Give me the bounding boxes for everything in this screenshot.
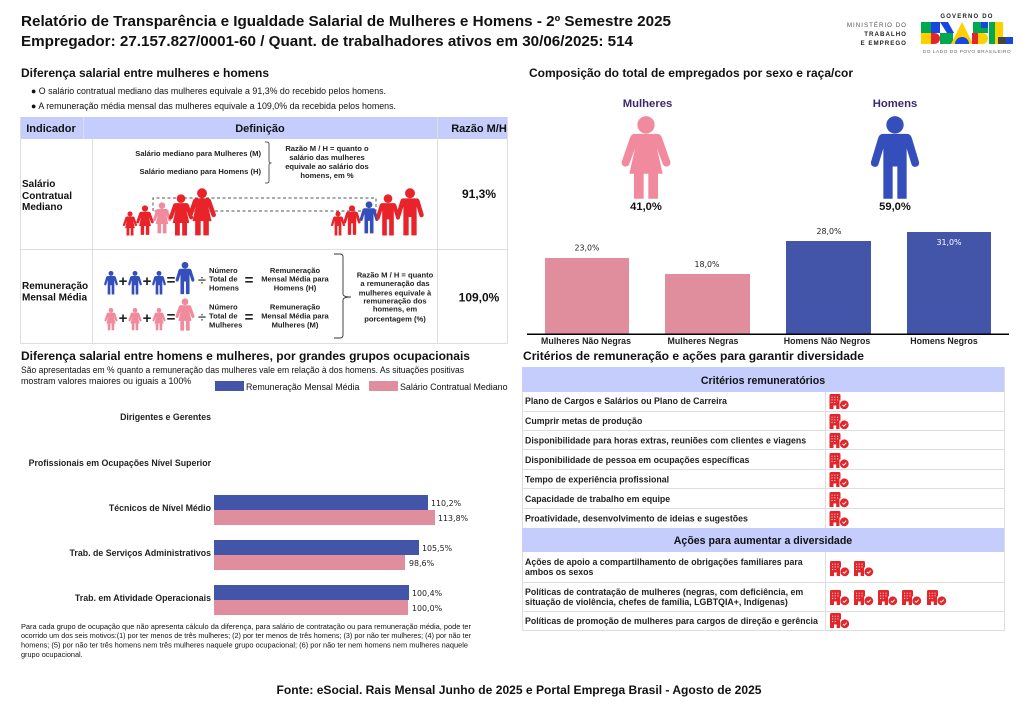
table: critérios remuneratórios: Capacidade de trabalho em equipe bbox=[525, 494, 670, 504]
row: salário contratual mediano: Contratual bbox=[22, 191, 72, 202]
table: critérios remuneratórios bbox=[522, 367, 1004, 630]
bar chart: grupos ocupacionais: 110,2% bbox=[431, 499, 462, 508]
panel: diferença salarial entre mulheres e homens bbox=[20, 66, 508, 344]
row: remuneração mensal média: Mensal Média para bbox=[261, 312, 330, 320]
row: remuneração mensal média: Homens bbox=[209, 284, 239, 292]
row: remuneração mensal média: Homens (H) bbox=[274, 284, 317, 292]
row: remuneração mensal média: Mulheres bbox=[209, 320, 242, 330]
row: remuneração mensal média: homens, em bbox=[373, 304, 417, 314]
row: salário contratual mediano: Mediano bbox=[22, 202, 63, 213]
legend: Remuneração Mensal Média bbox=[246, 382, 360, 392]
row: remuneração mensal média: = bbox=[167, 309, 176, 326]
row: remuneração mensal média: porcentagem (%) bbox=[364, 314, 426, 324]
table: ações para aumentar a diversidade: Ações de apoio a compartilhamento de obrigações familiares para bbox=[525, 557, 803, 567]
heading: Critérios de remuneração e ações para garantir diversidade bbox=[523, 349, 864, 363]
bar chart: grupos ocupacionais: 100,0% bbox=[412, 604, 443, 613]
row: salário contratual mediano: Salário bbox=[22, 179, 55, 190]
row: salário contratual mediano: Salário mediano para Mulheres (M) bbox=[135, 149, 261, 158]
table: ações para aumentar a diversidade: Ações para aumentar a diversidade bbox=[674, 535, 852, 547]
text block: footnote: Para cada grupo de ocupação que não apresenta cálculo da diferença, para salário de contratação ou para remuneração média, pode ter bbox=[21, 622, 472, 631]
table header: Definição bbox=[235, 123, 285, 135]
icon: homens: 59,0% bbox=[879, 201, 911, 213]
icon: homens bbox=[871, 98, 919, 213]
icon: mulheres: Mulheres bbox=[623, 98, 672, 110]
heading: Diferença salarial entre homens e mulheres, por grandes grupos ocupacionais bbox=[21, 349, 470, 363]
bar chart: composição: 23,0% bbox=[574, 244, 600, 252]
row: remuneração mensal média: mulheres equivale à bbox=[359, 288, 432, 298]
logo: governo do Brasil: GOVERNO DO bbox=[940, 14, 994, 20]
text block: footnote bbox=[21, 622, 472, 659]
table header: Indicador bbox=[26, 123, 76, 135]
row: remuneração mensal média: = bbox=[167, 272, 176, 289]
table: critérios remuneratórios: Disponibilidade para horas extras, reuniões com clientes e viagens bbox=[525, 436, 806, 446]
row: salário contratual mediano: Razão M / H = quanto o bbox=[285, 144, 369, 153]
bar chart: grupos ocupacionais: Técnicos de Nível Médio bbox=[109, 503, 212, 513]
icon: mulheres bbox=[622, 98, 672, 213]
row: salário contratual mediano bbox=[22, 142, 496, 236]
text block: key findings: ● A remuneração média mensal das mulheres equivale a 109,0% da recebida pelos homens. bbox=[31, 101, 396, 111]
row: remuneração mensal média: Remuneração bbox=[270, 302, 320, 312]
row: salário contratual mediano: salário das mulheres bbox=[289, 153, 365, 162]
icons: critérios bbox=[830, 394, 849, 526]
logo: ministério bbox=[847, 22, 907, 47]
icons: ações bbox=[830, 561, 946, 628]
bar chart: grupos ocupacionais: 98,6% bbox=[409, 559, 435, 568]
panel: composição por sexo e raça/cor bbox=[527, 66, 1009, 346]
legend: Salário Contratual Mediano bbox=[400, 382, 508, 392]
bar chart: composição: 31,0% bbox=[936, 238, 962, 247]
bar chart: composição: 28,0% bbox=[816, 227, 842, 236]
text block: explanation: São apresentadas em % quanto a remuneração das mulheres vale em relação à dos homens. As situações positivas bbox=[21, 365, 465, 375]
row: remuneração mensal média: Razão M / H = quanto bbox=[357, 270, 434, 280]
row: remuneração mensal média: ÷ bbox=[198, 272, 206, 289]
heading: Diferença salarial entre mulheres e homens bbox=[21, 66, 269, 80]
table: ações para aumentar a diversidade: Políticas de contratação de mulheres (negras, com deficiência, em bbox=[525, 587, 803, 597]
icon: mulheres: 41,0% bbox=[630, 201, 662, 213]
title bbox=[21, 14, 671, 50]
bar chart: composição: Homens Negros bbox=[910, 336, 978, 346]
source footer: Fonte: eSocial. Rais Mensal Junho de 2025 e Portal Emprega Brasil - Agosto de 2025 bbox=[276, 685, 762, 697]
row: remuneração mensal média: Número bbox=[209, 302, 238, 312]
row: remuneração mensal média: Remuneração bbox=[22, 281, 88, 292]
bar chart: composição: Mulheres Negras bbox=[668, 336, 739, 346]
table: critérios remuneratórios: Plano de Cargos e Salários ou Plano de Carreira bbox=[525, 396, 727, 406]
row: remuneração mensal média: = bbox=[245, 272, 254, 289]
text block: explanation bbox=[21, 365, 465, 386]
row: remuneração mensal média: Número bbox=[209, 266, 238, 275]
table: critérios remuneratórios: Cumprir metas de produção bbox=[525, 416, 643, 426]
row: remuneração mensal média: remuneração dos bbox=[363, 296, 427, 306]
bar chart: grupos ocupacionais: 113,8% bbox=[438, 514, 469, 523]
legend bbox=[215, 381, 508, 392]
text block: key findings: ● O salário contratual mediano das mulheres equivale a 91,3% do recebido pelos homens. bbox=[31, 86, 386, 96]
bar chart: composição: Homens Não Negros bbox=[784, 336, 870, 346]
bar chart: grupos ocupacionais: 100,4% bbox=[412, 589, 443, 598]
panel: diferença por grandes grupos ocupacionais bbox=[21, 349, 508, 659]
row: salário contratual mediano: Salário mediano para Homens (H) bbox=[139, 167, 261, 176]
row: remuneração mensal média: Mulheres (M) bbox=[272, 320, 319, 330]
bar chart: composição bbox=[527, 227, 1009, 346]
row: remuneração mensal média: Mensal Média para bbox=[261, 274, 330, 284]
row: remuneração mensal média: a remuneração das bbox=[360, 279, 430, 288]
row: remuneração mensal média: Mensal Média bbox=[22, 292, 87, 304]
row: remuneração mensal média: + bbox=[119, 273, 128, 290]
row: remuneração mensal média: Remuneração bbox=[270, 266, 320, 275]
title: Relatório de Transparência e Igualdade Salarial de Mulheres e Homens - 2º Semestre 2025 bbox=[21, 14, 671, 30]
row: remuneração mensal média: 109,0% bbox=[459, 290, 500, 304]
table: ações para aumentar a diversidade: Políticas de promoção de mulheres para cargos de direção e gerência bbox=[525, 616, 818, 626]
row: remuneração mensal média: = bbox=[245, 309, 254, 326]
row: remuneração mensal média: ÷ bbox=[198, 309, 206, 326]
table: ações para aumentar a diversidade: ambos os sexos bbox=[525, 567, 594, 577]
row: salário contratual mediano: homens, em % bbox=[300, 171, 354, 180]
text block: key findings bbox=[31, 86, 396, 111]
bar chart: grupos ocupacionais: Trab. em Atividade Operacionais bbox=[75, 593, 211, 603]
row: remuneração mensal média: + bbox=[119, 310, 128, 327]
panel: critérios de remuneração e ações bbox=[522, 349, 1004, 630]
bar chart: grupos ocupacionais: 105,5% bbox=[422, 544, 453, 553]
row: remuneração mensal média bbox=[22, 254, 500, 338]
logo: governo do Brasil: DO LADO DO POVO BRASILEIRO bbox=[923, 49, 1011, 55]
logo: ministério: MINISTÉRIO DO bbox=[847, 22, 907, 29]
table: critérios remuneratórios: Critérios remuneratórios bbox=[701, 375, 825, 387]
text block: explanation: mostram valores maiores ou iguais a 100% bbox=[21, 376, 191, 386]
table: ações para aumentar a diversidade: situação de violência, chefes de família, LGBTQIA+, Indígenas) bbox=[525, 597, 788, 607]
text block: footnote: grupo ocupacional. bbox=[21, 650, 83, 659]
row: salário contratual mediano: 91,3% bbox=[462, 187, 496, 201]
table: critérios remuneratórios: Tempo de experiência profissional bbox=[525, 474, 669, 484]
logo: governo do Brasil bbox=[921, 14, 1013, 55]
icon: homens: Homens bbox=[873, 98, 917, 110]
bar chart: grupos ocupacionais: Profissionais em Ocupações Nível Superior bbox=[29, 458, 212, 468]
title: Empregador: 27.157.827/0001-60 / Quant. de trabalhadores ativos em 30/06/2025: 514 bbox=[21, 34, 633, 50]
table: ações para aumentar a diversidade bbox=[522, 528, 1004, 628]
table header bbox=[26, 123, 507, 135]
row: remuneração mensal média: + bbox=[143, 310, 152, 327]
logo: ministério: E EMPREGO bbox=[861, 40, 907, 47]
table: critérios remuneratórios: Disponibilidade de pessoa em ocupações específicas bbox=[525, 455, 750, 465]
bar chart: composição: 18,0% bbox=[694, 260, 720, 269]
row: salário contratual mediano: equivale ao salário dos bbox=[285, 162, 369, 171]
bar chart: grupos ocupacionais: Trab. de Serviços Administrativos bbox=[70, 548, 211, 558]
heading: Composição do total de empregados por sexo e raça/cor bbox=[529, 66, 853, 80]
table: indicators bbox=[20, 117, 508, 344]
row: remuneração mensal média: Total de bbox=[209, 274, 238, 284]
bar chart: composição: Mulheres Não Negras bbox=[541, 336, 631, 346]
text block: footnote: homens; (5) por não ter três homens nem três mulheres naquele grupo ocupacional; (6) por não ter nem homens nem mulheres naquele bbox=[21, 640, 468, 650]
table: critérios remuneratórios: Proatividade, desenvolvimento de ideias e sugestões bbox=[525, 514, 748, 524]
bar chart: grupos ocupacionais: Dirigentes e Gerentes bbox=[120, 412, 211, 422]
row: remuneração mensal média: + bbox=[143, 273, 152, 290]
row: remuneração mensal média: Total de bbox=[209, 312, 238, 320]
logo: ministério: TRABALHO bbox=[864, 31, 907, 38]
bar chart: grupos ocupacionais bbox=[29, 412, 469, 615]
text block: footnote: ocorrido um dos seis motivos:(1) por ter menos de três mulheres; (2) por ter menos de três homens; (3) por não ter mulheres; (4) por não ter bbox=[21, 631, 472, 640]
table header: Razão M/H bbox=[451, 123, 507, 135]
